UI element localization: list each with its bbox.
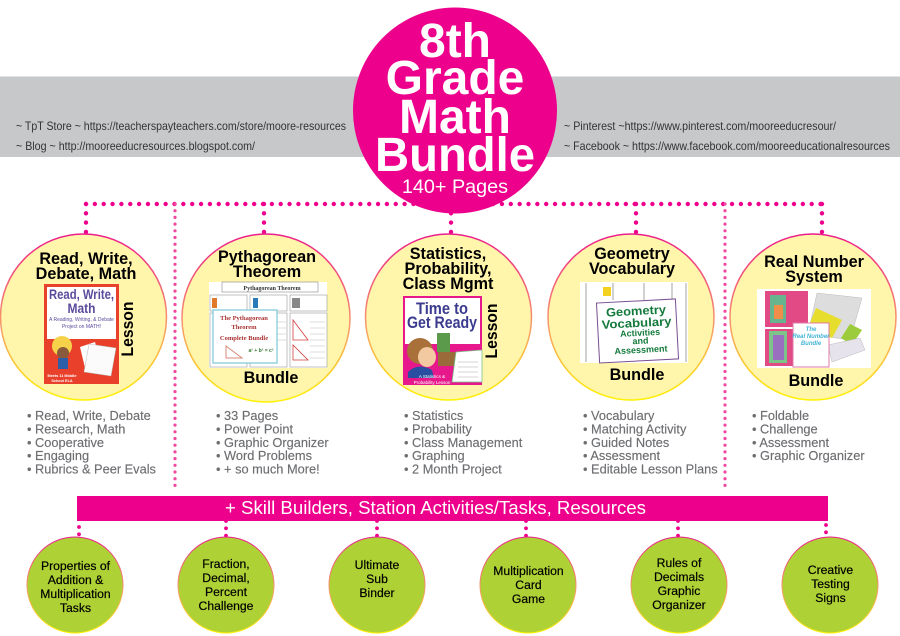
bullet list: real number system: • Foldable [752,408,809,423]
resource: rules of decimals graphic organizer [631,537,727,633]
panel: pythagorean theorem: Bundle [244,369,298,387]
resource: fraction decimal percent challenge: Percent [205,585,248,599]
bullet list: statistics: • 2 Month Project [404,462,502,476]
bullet list: statistics: • Graphing [404,448,465,463]
panel: read write debate math [0,234,166,400]
thumbnail: real number bundle [757,289,871,368]
bullet list: read write debate math: • Read, Write, Debate [27,408,151,423]
contact links left [16,120,346,153]
panel: statistics probability class management: Class Mgmt [403,275,494,293]
resource: ultimate sub binder: Binder [359,586,395,600]
bullet list: read write debate math [27,408,156,476]
title badge: 140+ Pages [402,176,508,198]
thumbnail: read write math cover: Meets 11 Middle [48,374,76,378]
resource: multiplication card game [480,537,576,633]
thumbnail: time to get ready cover [403,296,482,385]
bullet list: pythagorean theorem: • + so much More! [216,462,320,476]
bullet list: pythagorean theorem: • 33 Pages [216,408,278,423]
title badge [353,8,557,214]
panel: statistics probability class management: Lesson [483,304,501,358]
bullet list: real number system [752,408,865,463]
title badge: Bundle [375,129,535,182]
resource: rules of decimals graphic organizer: Rules of [657,556,702,570]
thumbnail: pythagorean bundle: Pythagorean Theorem [243,286,301,292]
thumbnail: time to get ready cover: Get Ready [407,313,477,332]
resource: multiplication card game: Multiplication [493,564,564,578]
bullet list: geometry vocabulary: • Vocabulary [583,408,655,423]
panel: geometry vocabulary [548,234,714,400]
panel: statistics probability class management [366,234,532,400]
bullet list: pythagorean theorem: • Graphic Organizer [216,435,329,450]
bullet list: real number system: • Assessment [752,435,829,450]
title badge: Grade [386,52,524,105]
contact links left: ~ Blog ~ http://mooreeducresources.blogspot.com/ [16,140,256,153]
bullet list: statistics: • Statistics [404,408,463,423]
panel: read write debate math: Debate, Math [36,265,136,283]
panel: real number system: Real Number [764,253,865,271]
bullet list: geometry vocabulary [583,408,718,476]
resource: properties of addition and multiplication tasks: Addition & [48,573,103,587]
thumbnail: pythagorean bundle: Complete Bundle [220,335,268,342]
thumbnail: geometry vocabulary cover: Assessment [614,343,668,356]
thumbnail: read write math cover: Math [68,300,96,316]
panel: pythagorean theorem [182,234,350,402]
panel: geometry vocabulary: Bundle [610,366,664,384]
bullet list: real number system: • Graphic Organizer [752,448,865,463]
thumbnail: time to get ready cover: Time to [416,299,468,318]
title badge: Math [399,91,511,144]
resource: multiplication card game: Card [515,578,542,592]
panel: real number system [730,234,896,400]
thumbnail: geometry vocabulary cover: and [632,335,649,346]
thumbnail: read write math cover: Project on MATH! [62,324,101,330]
resource: creative testing signs: Signs [815,591,846,605]
thumbnail: geometry vocabulary cover [580,282,688,363]
resource: rules of decimals graphic organizer: Decimals [654,570,704,584]
contact links right [564,120,890,153]
bullet list: real number system: • Challenge [752,422,818,436]
resource: ultimate sub binder: Ultimate [355,558,400,572]
bullet list: read write debate math: • Cooperative [27,435,104,450]
bullet list: statistics: • Class Management [404,435,523,450]
thumbnail: time to get ready cover: Probability Lesson [414,380,451,385]
resource: creative testing signs: Testing [811,577,850,591]
resource: fraction decimal percent challenge: Challenge [199,599,254,613]
thumbnail: time to get ready cover: A Statistics & [419,374,445,379]
panel: geometry vocabulary: Vocabulary [589,260,675,278]
resource: ultimate sub binder: Sub [366,572,388,586]
thumbnail: pythagorean bundle: The Pythagorean [220,315,268,322]
bullet list: geometry vocabulary: • Matching Activity [583,422,687,436]
panel: real number system: System [785,268,843,286]
bullet list: pythagorean theorem [216,408,329,476]
title badge: 8th [419,15,491,68]
bullet list: statistics: • Probability [404,422,472,436]
thumbnail: pythagorean bundle [209,282,327,368]
bullet list: read write debate math: • Research, Math [27,422,125,436]
resource: properties of addition and multiplication tasks [27,537,123,633]
thumbnail: real number bundle: Real Number [792,334,830,340]
thumbnail: read write math cover: A Reading, Writing, & Debate [49,317,114,323]
panel: pythagorean theorem: Pythagorean [218,248,316,266]
panel: read write debate math: Read, Write, [39,250,133,268]
resource: multiplication card game: Game [512,592,545,606]
bullet list: geometry vocabulary: • Guided Notes [583,435,669,450]
skill builders banner [77,496,828,521]
resource: creative testing signs [782,537,878,633]
thumbnail: geometry vocabulary cover: Vocabulary [601,314,672,332]
panel: real number system: Bundle [789,372,843,390]
resource: rules of decimals graphic organizer: Organizer [652,598,706,612]
thumbnail: real number bundle: The [806,327,817,333]
resource: fraction decimal percent challenge: Fraction, [202,557,250,571]
resource: rules of decimals graphic organizer: Graphic [658,584,700,598]
panel: pythagorean theorem: Theorem [233,263,301,281]
resource: creative testing signs: Creative [808,563,853,577]
skill builders banner: + Skill Builders, Station Activities/Tasks, Resources [225,498,646,518]
thumbnail: read write math cover: School ELA [51,379,73,383]
thumbnail: geometry vocabulary cover: Activities [620,327,660,339]
thumbnail: read write math cover: Read, Write, [49,286,114,302]
resource: properties of addition and multiplication tasks: Tasks [60,601,91,615]
dotted connectors to resource circles [79,521,826,536]
resource: properties of addition and multiplication tasks: Multiplication [40,587,111,601]
bullet list: geometry vocabulary: • Editable Lesson Plans [583,462,718,476]
panel: geometry vocabulary: Geometry [594,245,670,263]
thumbnail: real number bundle: Bundle [801,341,822,347]
bullet list: pythagorean theorem: • Word Problems [216,448,312,463]
bullet list: pythagorean theorem: • Power Point [216,422,293,436]
resource: fraction decimal percent challenge: Decimal, [202,571,250,585]
resource: properties of addition and multiplication tasks: Properties of [41,559,111,573]
panel: read write debate math: Lesson [119,302,137,356]
dotted connector lines [86,204,822,492]
thumbnail: read write math cover [44,284,119,384]
contact links right: ~ Pinterest ~https://www.pinterest.com/mooreeducresour/ [564,120,837,133]
resource: fraction decimal percent challenge [178,537,274,633]
thumbnail: pythagorean bundle: Theorem [231,324,257,331]
bullet list: read write debate math: • Rubrics & Peer Evals [27,462,156,476]
bullet list: statistics [404,408,523,476]
panel: statistics probability class management: Statistics, [410,245,486,263]
panel: statistics probability class management: Probability, [405,260,491,278]
resource: ultimate sub binder [329,537,425,633]
gray contact band [0,76,900,157]
thumbnail: geometry vocabulary cover: Geometry [606,302,667,320]
contact links left: ~ TpT Store ~ https://teacherspayteachers.com/store/moore-resources [16,120,346,133]
bullet list: geometry vocabulary: • Assessment [583,448,660,463]
bullet list: read write debate math: • Engaging [27,448,89,463]
thumbnail: pythagorean bundle: a² + b² = c² [248,348,274,354]
